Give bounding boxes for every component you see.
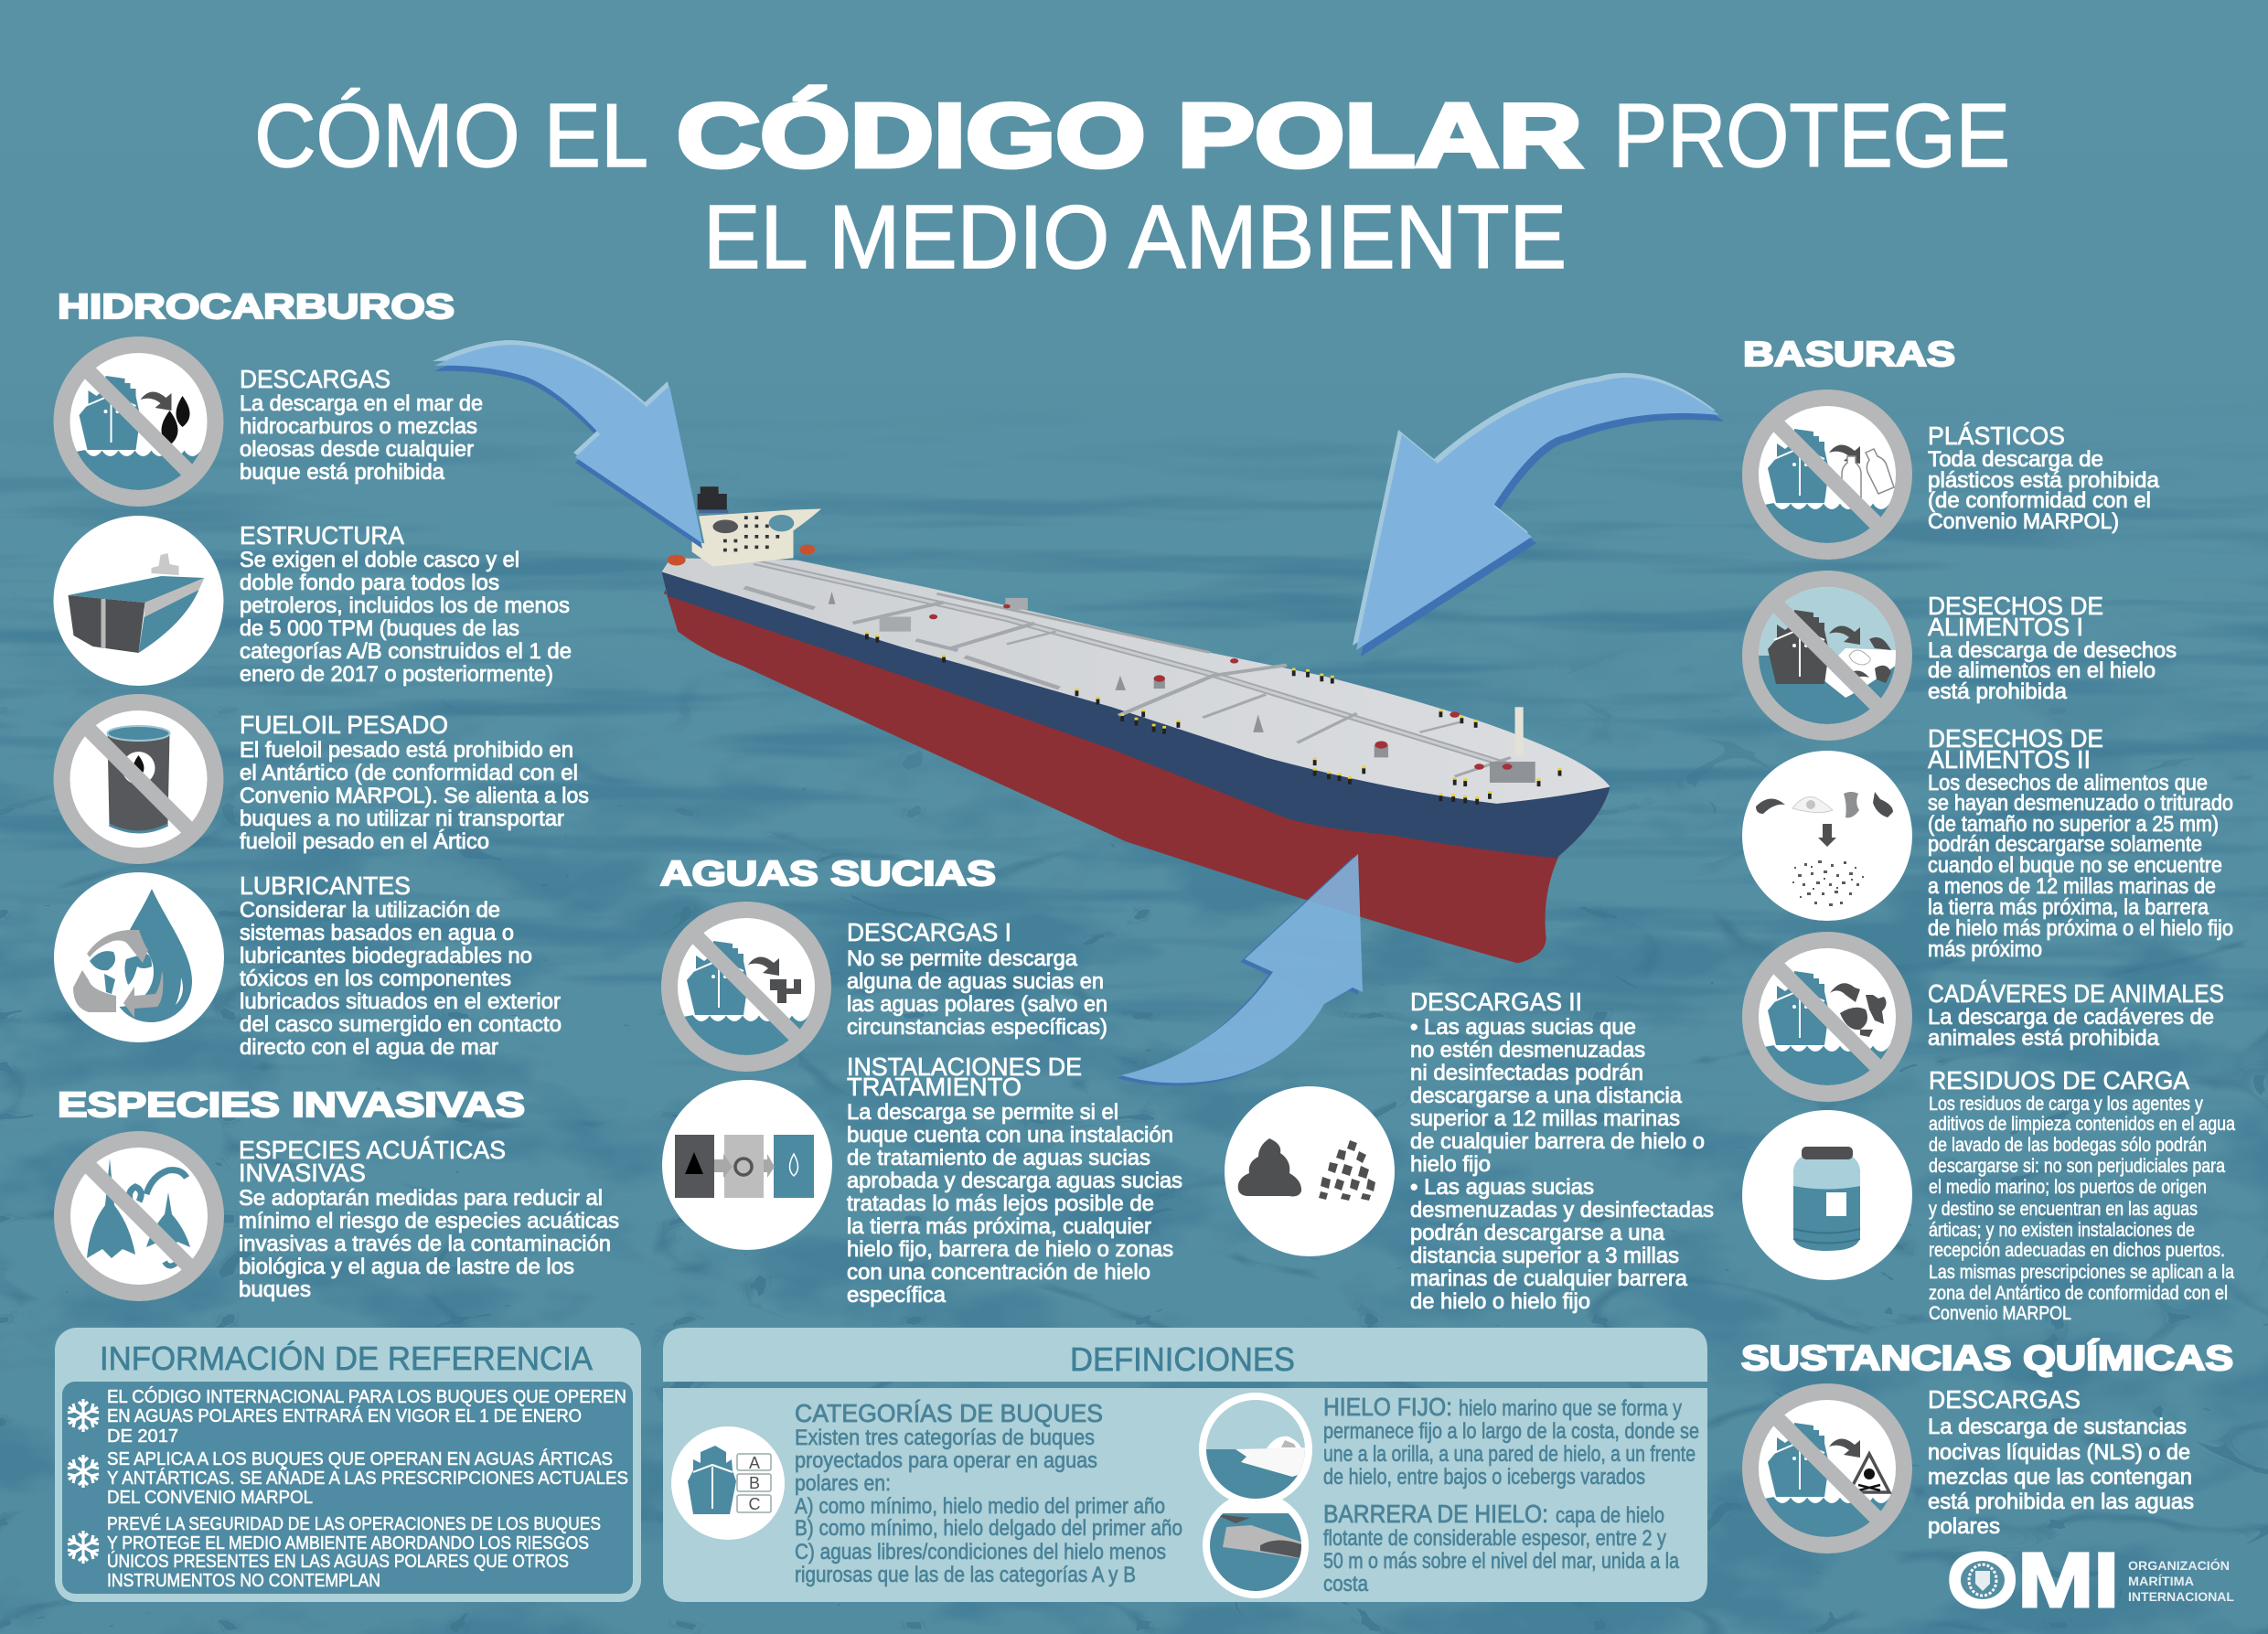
panel: cadáveres de animales bbox=[1742, 932, 2224, 1102]
text: desechos II bbox=[1928, 724, 2233, 962]
text: scope: SE APLICA A LOS BUQUES QUE OPERAN EN AGUAS ÁRTICAS bbox=[107, 1448, 613, 1469]
text: scope bbox=[107, 1448, 628, 1508]
text: estructura: de 5 000 TPM (buques de las bbox=[240, 616, 519, 641]
panel: desechos de alimentos I bbox=[1742, 571, 2177, 741]
text: estructura: petroleros, incluidos los de menos bbox=[240, 593, 570, 618]
text: descargas II: hielo fijo bbox=[1410, 1152, 1491, 1177]
text: descargas bbox=[240, 365, 483, 485]
text: residuos: el medio marino; los puertos de origen bbox=[1929, 1177, 2207, 1198]
icon: ship categories: B bbox=[749, 1474, 760, 1492]
text: residuos: de lavado de las bodegas sólo podrán bbox=[1929, 1135, 2207, 1156]
panel: hidrocarburos descargas bbox=[53, 336, 483, 507]
title bbox=[254, 85, 2010, 287]
text: lubricantes: directo con el agua de mar bbox=[240, 1035, 498, 1060]
logo: OMI: ORGANIZACIÓN bbox=[2128, 1557, 2230, 1573]
background: ice-covered sea bbox=[0, 479, 2268, 1634]
panel heading: INFORMACIÓN DE REFERENCIA bbox=[100, 1340, 593, 1377]
text: descargas I: las aguas polares (salvo en bbox=[847, 992, 1107, 1017]
text: categorías de buques bbox=[795, 1399, 1182, 1587]
text: scope: DEL CONVENIO MARPOL bbox=[107, 1488, 313, 1508]
text: residuos: RESIDUOS DE CARGA bbox=[1929, 1066, 2189, 1095]
text: descargas I: circunstancias específicas) bbox=[847, 1015, 1107, 1040]
panel: plásticos bbox=[1742, 390, 2160, 560]
text: desechos II: podrán descargarse solamente bbox=[1928, 832, 2202, 857]
text: residuos: Convenio MARPOL bbox=[1929, 1303, 2071, 1324]
icon: snowflake 2 bbox=[68, 1455, 99, 1488]
text: categorías de buques: proyectados para operar en aguas bbox=[795, 1448, 1097, 1473]
icon: snowflake 3 bbox=[68, 1531, 99, 1564]
title: CÓMO EL bbox=[254, 85, 648, 186]
icon: no oil discharge bbox=[53, 336, 223, 507]
text: descargas: DESCARGAS bbox=[240, 365, 390, 393]
text: descargas: hidrocarburos o mezclas bbox=[240, 414, 477, 439]
icon: untreated and comminuted sewage bbox=[1225, 1086, 1395, 1256]
title: PROTEGE bbox=[1613, 85, 2010, 186]
text: barrera de hielo: BARRERA DE HIELO: bbox=[1323, 1500, 1548, 1528]
logo: OMI: OMI bbox=[1947, 1537, 2119, 1623]
text: especies acuáticas: buques bbox=[239, 1277, 311, 1302]
text: descargas II: distancia superior a 3 millas bbox=[1410, 1244, 1679, 1268]
text: descargas: buque está prohibida bbox=[240, 460, 445, 485]
text: desechos II: se hayan desmenuzado o triturado bbox=[1928, 791, 2233, 816]
text: desechos I: está prohibida bbox=[1928, 679, 2068, 704]
text: descargas II: podrán descargarse a una bbox=[1410, 1221, 1665, 1245]
heading: aguas sucias: AGUAS SUCIAS bbox=[660, 855, 996, 893]
panel: definiciones bbox=[663, 1328, 1707, 1602]
arrow: top-left, pointing to ship stern bbox=[433, 340, 702, 549]
text: lubricantes: Considerar la utilización de bbox=[240, 898, 500, 923]
text: instalaciones bbox=[847, 1052, 1182, 1308]
icon: comminuted food waste bbox=[1742, 751, 1912, 921]
text: descargas químicas: mezclas que las contengan bbox=[1928, 1465, 2192, 1490]
panel: aguas sucias descargas I bbox=[661, 902, 1107, 1072]
text: descargas: La descarga en el mar de bbox=[240, 391, 483, 416]
text: desechos II: la tierra más próxima, la barrera bbox=[1928, 895, 2209, 920]
text: barrera de hielo: flotante de considerable espesor, entre 2 y bbox=[1323, 1526, 1666, 1551]
icon: double hull section bbox=[53, 516, 223, 686]
title: CÓDIGO POLAR bbox=[677, 85, 1582, 186]
text: descargas II: • Las aguas sucias bbox=[1410, 1175, 1594, 1200]
icon: sewage treatment process bbox=[662, 1080, 832, 1250]
text: fueloil: fueloil pesado en el Ártico bbox=[240, 829, 489, 854]
panel: residuos de carga bbox=[1742, 1066, 2235, 1324]
text: cadáveres: CADÁVERES DE ANIMALES bbox=[1928, 979, 2224, 1008]
text: especies acuáticas: INVASIVAS bbox=[239, 1159, 366, 1187]
text: descargas II: DESCARGAS II bbox=[1410, 988, 1582, 1016]
icon: water drop, globe and recycling arrows bbox=[54, 872, 224, 1042]
panel: instalaciones de tratamiento bbox=[662, 1052, 1182, 1308]
text: categorías de buques: B) como mínimo, hielo delgado del primer año bbox=[795, 1516, 1182, 1541]
text: residuos: árticas; y no existen instalaciones de bbox=[1929, 1220, 2195, 1241]
text: especies acuáticas: mínimo el riesgo de especies acuáticas bbox=[239, 1209, 619, 1234]
text: descargas II: ni desinfectadas podrán bbox=[1410, 1061, 1643, 1085]
text: lubricantes: LUBRICANTES bbox=[240, 871, 411, 900]
text: instalaciones: La descarga se permite si el bbox=[847, 1100, 1118, 1125]
text: desechos II: cuando el buque no se encuentre bbox=[1928, 853, 2222, 878]
text: descargas químicas: La descarga de sustancias bbox=[1928, 1415, 2187, 1439]
text: descargas II bbox=[1410, 988, 1714, 1314]
text: instalaciones: la tierra más próxima, cualquier bbox=[847, 1214, 1151, 1239]
text: descargas II: de hielo o hielo fijo bbox=[1410, 1289, 1590, 1314]
text: instalaciones: TRATAMIENTO bbox=[847, 1073, 1022, 1101]
text: estructura: enero de 2017 o posteriormente) bbox=[240, 662, 553, 687]
text: categorías de buques: Existen tres categorías de buques bbox=[795, 1426, 1095, 1450]
text: estructura bbox=[240, 521, 572, 687]
text: purpose: PREVÉ LA SEGURIDAD DE LAS OPERACIONES DE LOS BUQUES bbox=[107, 1513, 601, 1534]
text: plásticos: (de conformidad con el bbox=[1928, 488, 2151, 513]
heading: hidrocarburos: HIDROCARBUROS bbox=[58, 288, 455, 326]
text: descargas químicas bbox=[1928, 1385, 2194, 1539]
text: descargas II: de cualquier barrera de hielo o bbox=[1410, 1129, 1705, 1154]
text: estructura: Se exigen el doble casco y el bbox=[240, 548, 519, 572]
panel: aguas sucias descargas II bbox=[1225, 988, 1714, 1314]
text: descargas químicas: nocivas líquidas (NLS) o de bbox=[1928, 1440, 2190, 1465]
logo: OMI: MARÍTIMA bbox=[2128, 1574, 2194, 1588]
text: desechos II: DESECHOS DE bbox=[1928, 724, 2103, 753]
text: residuos: y destino se encuentran en las aguas bbox=[1929, 1199, 2198, 1220]
text: hielo fijo: HIELO FIJO: bbox=[1323, 1393, 1452, 1421]
text: cadáveres: La descarga de cadáveres de bbox=[1928, 1005, 2214, 1030]
text: instalaciones: con una concentración de hielo bbox=[847, 1260, 1150, 1285]
icon: fast ice photo bbox=[1199, 1393, 1312, 1506]
text: lubricantes: lubricantes biodegradables no bbox=[240, 944, 532, 968]
text: plásticos: PLÁSTICOS bbox=[1928, 422, 2065, 450]
text: lubricantes bbox=[240, 871, 562, 1060]
text: desechos II: a menos de 12 millas marinas de bbox=[1928, 874, 2216, 899]
text: plásticos: plásticos está prohibida bbox=[1928, 468, 2160, 493]
heading: basuras: BASURAS bbox=[1743, 336, 1955, 374]
text: descargas I: No se permite descarga bbox=[847, 946, 1078, 971]
text: desechos II: ALIMENTOS II bbox=[1928, 745, 2091, 774]
panel: fueloil pesado bbox=[53, 694, 589, 864]
text: lubricantes: sistemas basados en agua o bbox=[240, 921, 514, 945]
text: purpose: INSTRUMENTOS NO CONTEMPLAN bbox=[107, 1571, 380, 1591]
arrow: bottom, pointing to ship hull bbox=[1117, 854, 1363, 1085]
panel: desechos de alimentos II bbox=[1742, 724, 2233, 962]
text: plásticos: Toda descarga de bbox=[1928, 447, 2103, 472]
icon: no food waste on ice bbox=[1742, 571, 1912, 741]
text: plásticos: Convenio MARPOL) bbox=[1928, 509, 2119, 534]
text: hielo fijo bbox=[1323, 1393, 1699, 1490]
text: fueloil: FUELOIL PESADO bbox=[240, 710, 448, 739]
text: descargas II: no estén desmenuzadas bbox=[1410, 1038, 1645, 1063]
panel: sustancias químicas descargas bbox=[1742, 1383, 2194, 1554]
icon: no animal carcasses bbox=[1742, 932, 1912, 1102]
text: desechos I bbox=[1928, 592, 2177, 704]
text: descargas II: superior a 12 millas marinas bbox=[1410, 1106, 1680, 1131]
text: descargas químicas: está prohibida en las aguas bbox=[1928, 1490, 2194, 1514]
text: barrera de hielo: costa bbox=[1323, 1572, 1369, 1597]
text: lubricantes: lubricados situados en el exterior bbox=[240, 989, 561, 1014]
panel: especies acuáticas invasivas bbox=[54, 1131, 619, 1302]
icon: prohibited fuel barrel bbox=[53, 694, 223, 864]
text: desechos II: más próximo bbox=[1928, 937, 2042, 962]
text: descargas químicas: polares bbox=[1928, 1514, 2000, 1539]
text: purpose: Y PROTEGE EL MEDIO AMBIENTE ABORDANDO LOS RIESGOS bbox=[107, 1533, 589, 1554]
panel: estructura bbox=[53, 516, 572, 687]
text: entry into force: EL CÓDIGO INTERNACIONAL PARA LOS BUQUES QUE OPEREN bbox=[107, 1386, 626, 1407]
text: categorías de buques: C) aguas libres/condiciones del hielo menos bbox=[795, 1540, 1166, 1565]
text: entry into force: EN AGUAS POLARES ENTRARÁ EN VIGOR EL 1 DE ENERO bbox=[107, 1405, 582, 1426]
arrow: top-right, pointing to ship deck bbox=[1353, 373, 1724, 657]
text: desechos II: de hielo más próxima o el hielo fijo bbox=[1928, 916, 2233, 941]
text: purpose bbox=[107, 1513, 601, 1591]
superstructure bbox=[668, 486, 821, 566]
panel heading: DEFINICIONES bbox=[1070, 1340, 1295, 1378]
text: hielo fijo: hielo marino que se forma y bbox=[1459, 1396, 1682, 1421]
text: descargas I: alguna de aguas sucias en bbox=[847, 969, 1104, 994]
text: descargas I bbox=[847, 918, 1107, 1040]
text: desechos II: (de tamaño no superior a 25 mm) bbox=[1928, 812, 2219, 837]
text: desechos I: de alimentos en el hielo bbox=[1928, 658, 2156, 683]
text: categorías de buques: rigurosas que las de las categorías A y B bbox=[795, 1563, 1136, 1587]
text: desechos I: ALIMENTOS I bbox=[1928, 613, 2083, 641]
text: instalaciones: tratadas lo más lejos posible de bbox=[847, 1191, 1154, 1216]
text: instalaciones: INSTALACIONES DE bbox=[847, 1052, 1082, 1081]
text: especies acuáticas: Se adoptarán medidas para reducir al bbox=[239, 1186, 603, 1211]
logo: OMI: INTERNACIONAL bbox=[2128, 1589, 2234, 1604]
text: especies acuáticas: biológica y el agua de lastre de los bbox=[239, 1255, 574, 1279]
text: barrera de hielo bbox=[1323, 1500, 1680, 1597]
text: fueloil: el Antártico (de conformidad con el bbox=[240, 761, 578, 785]
text: instalaciones: buque cuenta con una instalación bbox=[847, 1123, 1173, 1148]
icon: no sewage discharge bbox=[661, 902, 831, 1072]
text: desechos I: La descarga de desechos bbox=[1928, 638, 2177, 663]
text: entry into force bbox=[107, 1386, 626, 1447]
text: categorías de buques: CATEGORÍAS DE BUQUES bbox=[795, 1399, 1103, 1427]
text: purpose: ÚNICOS PRESENTES EN LAS AGUAS POLARES QUE OTROS bbox=[107, 1551, 569, 1572]
text: desechos I: DESECHOS DE bbox=[1928, 592, 2103, 620]
icon: cargo residue drum bbox=[1742, 1110, 1912, 1280]
panel: lubricantes bbox=[54, 871, 562, 1060]
text: residuos bbox=[1929, 1066, 2235, 1324]
text: instalaciones: hielo fijo, barrera de hielo o zonas bbox=[847, 1237, 1173, 1262]
text: descargas II: desmenuzadas y desinfectadas bbox=[1410, 1198, 1714, 1223]
ship illustration: oil tanker bbox=[662, 486, 1610, 963]
logo: OMI bbox=[1947, 1537, 2234, 1623]
text: especies acuáticas bbox=[239, 1136, 619, 1302]
text: descargas II: • Las aguas sucias que bbox=[1410, 1015, 1636, 1040]
text: lubricantes: del casco sumergido en contacto bbox=[240, 1012, 562, 1037]
text: descargas I: DESCARGAS I bbox=[847, 918, 1011, 946]
text: instalaciones: aprobada y descarga aguas sucias bbox=[847, 1169, 1182, 1193]
icon: ship categories: A bbox=[749, 1454, 760, 1472]
text: cadáveres: animales está prohibida bbox=[1928, 1026, 2160, 1051]
text: lubricantes: tóxicos en los componentes bbox=[240, 967, 511, 991]
icon: snowflake 1 bbox=[68, 1399, 99, 1432]
text: estructura: categorías A/B construidos el 1 de bbox=[240, 639, 572, 664]
text: residuos: descargarse si: no son perjudiciales para bbox=[1929, 1156, 2225, 1177]
text: desechos II: Los desechos de alimentos que bbox=[1928, 771, 2208, 796]
icon: no noxious liquid discharge bbox=[1742, 1383, 1912, 1554]
text: estructura: ESTRUCTURA bbox=[240, 521, 404, 550]
panel: información de referencia bbox=[55, 1328, 641, 1602]
text: barrera de hielo: capa de hielo bbox=[1556, 1503, 1664, 1528]
text: fueloil: Convenio MARPOL). Se alienta a los bbox=[240, 784, 589, 808]
text: descargas químicas: DESCARGAS bbox=[1928, 1385, 2081, 1414]
icon: ship categories bbox=[671, 1426, 785, 1540]
text: plásticos bbox=[1928, 422, 2160, 534]
text: categorías de buques: polares en: bbox=[795, 1471, 891, 1496]
text: instalaciones: de tratamiento de aguas sucias bbox=[847, 1146, 1150, 1170]
text: entry into force: DE 2017 bbox=[107, 1426, 178, 1447]
text: residuos: zona del Antártico de conformidad con el bbox=[1929, 1283, 2228, 1304]
text: fueloil bbox=[240, 710, 589, 854]
text: instalaciones: específica bbox=[847, 1283, 947, 1308]
text: hielo fijo: permanece fijo a lo largo de la costa, donde se bbox=[1323, 1419, 1699, 1444]
text: descargas: oleosas desde cualquier bbox=[240, 437, 474, 462]
heading: especies invasivas: ESPECIES INVASIVAS bbox=[58, 1086, 525, 1125]
text: hielo fijo: une a la orilla, a una pared de hielo, a un frente bbox=[1323, 1442, 1696, 1467]
text: cadáveres bbox=[1928, 979, 2224, 1051]
text: descargas II: marinas de cualquier barrera bbox=[1410, 1266, 1688, 1291]
text: residuos: Los residuos de carga y los agentes y bbox=[1929, 1094, 2203, 1115]
text: fueloil: buques a no utilizar ni transportar bbox=[240, 806, 564, 831]
title: EL MEDIO AMBIENTE bbox=[703, 187, 1567, 287]
icon: ship categories: C bbox=[748, 1495, 761, 1513]
icon: prohibited invasive aquatic species bbox=[54, 1131, 224, 1301]
text: fueloil: El fueloil pesado está prohibido en bbox=[240, 738, 573, 763]
heading: sustancias químicas: SUSTANCIAS QUÍMICAS bbox=[1741, 1338, 2233, 1378]
text: estructura: doble fondo para todos los bbox=[240, 571, 499, 595]
text: hielo fijo: de hielo, entre bajos o icebergs varados bbox=[1323, 1465, 1645, 1490]
text: residuos: recepción adecuadas en dichos puertos. bbox=[1929, 1240, 2225, 1261]
text: scope: Y ANTÁRTICAS. SE AÑADE A LAS PRESCRIPCIONES ACTUALES bbox=[107, 1467, 628, 1489]
text: descargas II: descargarse a una distancia bbox=[1410, 1084, 1683, 1108]
icon: no plastics discharge bbox=[1742, 390, 1912, 560]
text: especies acuáticas: ESPECIES ACUÁTICAS bbox=[239, 1136, 506, 1164]
icon: ice shelf photo bbox=[1203, 1500, 1309, 1598]
text: barrera de hielo: 50 m o más sobre el nivel del mar, unida a la bbox=[1323, 1549, 1680, 1574]
text: categorías de buques: A) como mínimo, hielo medio del primer año bbox=[795, 1494, 1165, 1519]
text: especies acuáticas: invasivas a través de la contaminación bbox=[239, 1232, 611, 1256]
